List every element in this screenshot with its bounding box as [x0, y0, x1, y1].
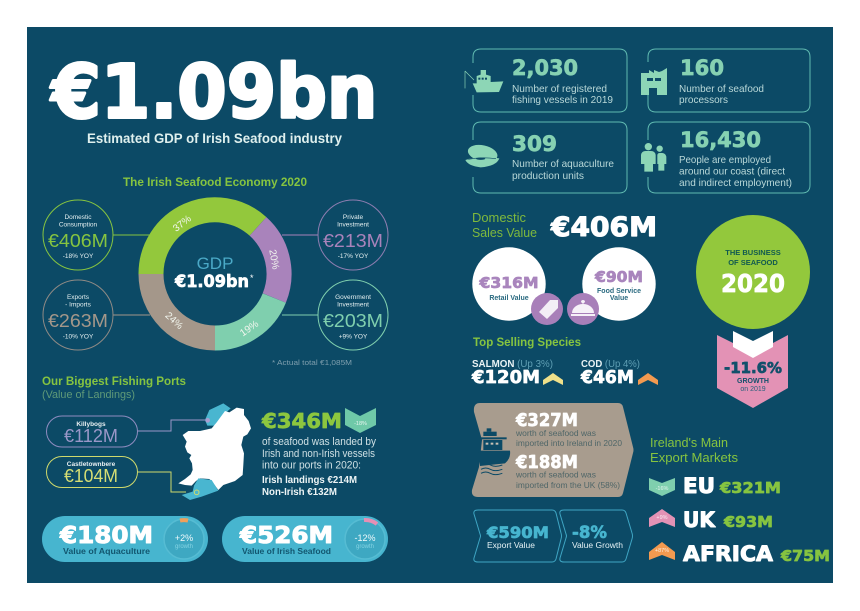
landings description: into our ports in 2020:	[262, 460, 361, 472]
heading: Top Selling Species	[473, 335, 581, 349]
callout: exports minus imports: Exports	[67, 294, 90, 301]
circle: food service value	[582, 247, 656, 321]
donut chart: 20%	[266, 249, 281, 270]
panel: imports: imported from the UK (58%)	[516, 480, 620, 490]
badge: growth on 2019: on 2019	[740, 386, 766, 393]
domestic sales total: €406M	[550, 212, 657, 243]
icon: factory	[641, 68, 667, 95]
heading: Ireland's Main	[650, 436, 728, 450]
stat box: aquaculture units	[465, 122, 627, 193]
callout: private investment: €213M	[323, 230, 383, 251]
callout: exports minus imports: - Imports	[65, 302, 92, 308]
species: salmon	[471, 358, 563, 388]
pill: value of aquaculture	[42, 516, 208, 562]
icon: price tag	[531, 293, 563, 325]
panel: imports	[472, 403, 634, 497]
species: salmon: SALMON (Up 3%)	[472, 358, 553, 370]
badge: business of seafood 2020: THE BUSINESS	[725, 248, 781, 257]
icon: ship on waves	[478, 428, 510, 475]
badge: business of seafood 2020: 2020	[721, 269, 785, 298]
pill: value of aquaculture: +2%	[175, 533, 193, 543]
donut chart: €1.09bn	[174, 272, 249, 292]
stat box: seafood processors: processors	[679, 94, 728, 106]
panel: imports: €327M	[515, 410, 578, 431]
stat box: seafood processors: Number of seafood	[679, 83, 764, 95]
panel: export value: Export Value	[487, 541, 536, 550]
icon: fishing boat	[465, 70, 503, 92]
callout: domestic consumption	[43, 200, 150, 270]
market: EU: -16%	[656, 486, 669, 492]
heading: The Irish Seafood Economy 2020	[123, 175, 307, 189]
callout: Killybogs: Killybogs	[76, 421, 106, 428]
badge: minus 18 percent: -18%	[354, 421, 367, 427]
market: Africa: AFRICA	[683, 542, 774, 566]
circle: retail value	[472, 247, 546, 321]
landings description: Irish and non-Irish vessels	[262, 448, 375, 460]
stat box: fishing vessels: Number of registered	[512, 83, 607, 95]
callout: domestic consumption: -18% YOY	[63, 253, 94, 260]
callout: exports minus imports: -10% YOY	[63, 334, 94, 340]
stat box: aquaculture units: 309	[512, 132, 557, 156]
subheading: (Value of Landings)	[42, 389, 135, 401]
landings total: €346M	[261, 409, 342, 433]
stat box: people employed: around our coast (direct	[679, 166, 785, 178]
stat box: people employed	[641, 122, 810, 193]
donut chart: GDP	[197, 254, 233, 273]
species: cod: COD (Up 4%)	[581, 358, 640, 370]
panel: imports: worth of seafood was	[515, 428, 596, 438]
market: EU: €321M	[719, 479, 781, 497]
callout: government investment: Government	[335, 294, 371, 301]
panel: seafood economy donut	[43, 175, 388, 367]
panel: imports: €188M	[515, 452, 578, 473]
callout: Castletownbere: Castletownbere	[67, 461, 116, 468]
pill: value of aquaculture: €180M	[59, 523, 153, 549]
species: cod: €46M	[580, 367, 634, 388]
panel: value growth: Value Growth	[572, 541, 623, 550]
panel: top selling species	[471, 335, 658, 388]
circle: retail value: Retail Value	[489, 295, 529, 302]
pill: value of Irish seafood	[222, 516, 388, 562]
market: UK: €93M	[723, 513, 773, 531]
callout: domestic consumption: Consumption	[59, 222, 98, 228]
panel: export value	[474, 510, 562, 562]
circle: food service value: €90M	[594, 268, 643, 286]
callout: exports minus imports	[43, 280, 150, 350]
footnote: * Actual total €1,085M	[272, 358, 352, 367]
species: cod	[580, 358, 658, 388]
callout: exports minus imports: €263M	[48, 310, 108, 331]
stat box: fishing vessels: 2,030	[512, 56, 578, 80]
market: Africa: +87%	[655, 548, 669, 554]
badge: business of seafood 2020	[696, 215, 810, 329]
map of Ireland	[178, 403, 251, 500]
icon: people	[641, 143, 666, 172]
pill: value of Irish seafood: Value of Irish Seafood	[242, 546, 331, 556]
landings description: Irish landings €214M	[262, 475, 357, 486]
badge: business of seafood 2020: OF SEAFOOD	[728, 258, 778, 267]
heading: Domestic	[472, 210, 526, 225]
callout: Killybogs: €112M	[64, 426, 118, 446]
stat box: aquaculture units: production units	[512, 170, 584, 182]
subtitle: Estimated GDP of Irish Seafood industry	[87, 131, 342, 146]
stat box: people employed: and indirect employment)	[679, 177, 792, 189]
stat box: people employed: People are employed	[679, 154, 771, 166]
heading	[650, 436, 738, 465]
stat box: seafood processors	[641, 49, 810, 112]
donut chart	[151, 210, 281, 339]
stat box: seafood processors: 160	[680, 56, 724, 80]
circle: food service value: Value	[610, 295, 628, 302]
callout: private investment: -17% YOY	[338, 253, 369, 260]
callout: Killybogs	[46, 416, 206, 447]
callout: domestic consumption: €406M	[48, 230, 108, 251]
pill: value of Irish seafood: growth	[356, 544, 374, 550]
market: UK	[649, 508, 773, 532]
market: Africa	[649, 542, 830, 566]
callout: private investment	[282, 200, 388, 270]
species: salmon: €120M	[471, 367, 540, 388]
pill: value of aquaculture: growth	[175, 544, 193, 550]
market: EU	[649, 474, 781, 498]
heading: Our Biggest Fishing Ports	[42, 374, 186, 388]
pill: value of Irish seafood: €526M	[239, 523, 333, 549]
panel: domestic sales	[472, 210, 657, 325]
landings description: of seafood was landed by	[262, 436, 376, 448]
panel: export markets	[649, 436, 830, 566]
pill: value of aquaculture: Value of Aquaculture	[63, 546, 150, 556]
badge: growth on 2019	[717, 331, 788, 408]
callout: domestic consumption: Domestic	[64, 214, 92, 221]
callout: private investment: Private	[343, 214, 363, 221]
landings description: Non-Irish €132M	[262, 487, 337, 498]
pill: value of Irish seafood: -12%	[354, 533, 376, 543]
panel: export value: €590M	[486, 523, 549, 542]
callout: government investment	[282, 280, 388, 350]
circle: food service value: Food Service	[597, 288, 641, 295]
market: Africa: €75M	[780, 547, 830, 565]
badge: growth on 2019: -11.6%	[724, 359, 782, 377]
icon: food cloche	[567, 293, 599, 325]
panel: value growth	[560, 510, 632, 562]
donut chart: 24%	[163, 310, 185, 332]
callout: Castletownbere: €104M	[64, 466, 118, 486]
callout: Castletownbere	[46, 456, 186, 492]
callout: private investment: Investment	[337, 222, 369, 228]
market: UK: UK	[683, 508, 716, 532]
panel: imports: imported into Ireland in 2020	[516, 438, 622, 448]
heading	[472, 210, 537, 240]
heading: Sales Value	[472, 225, 537, 240]
panel: fishing ports	[42, 374, 376, 500]
stat box: fishing vessels	[465, 49, 627, 112]
stat box: fishing vessels: fishing vessels in 2019	[512, 94, 613, 106]
badge: minus 18 percent	[345, 408, 376, 433]
panel: imports: worth of seafood was	[515, 470, 596, 480]
market: EU: EU	[683, 474, 715, 498]
badge: growth on 2019: GROWTH	[737, 378, 769, 385]
donut chart: *	[250, 273, 254, 283]
stat box: aquaculture units: Number of aquaculture	[512, 158, 614, 170]
market: UK: +9%	[656, 515, 668, 521]
callout: government investment: Investment	[337, 302, 369, 308]
stat box: people employed: 16,430	[680, 128, 761, 152]
title: €1.09bn	[50, 50, 378, 136]
icon: clam shell	[465, 142, 499, 167]
landings description	[262, 436, 376, 498]
heading: Export Markets	[650, 451, 738, 465]
donut chart: 37%	[171, 213, 194, 235]
callout: government investment: €203M	[323, 310, 383, 331]
callout: government investment: +9% YOY	[339, 334, 368, 340]
circle: retail value: €316M	[478, 274, 538, 292]
panel: value growth: -8%	[572, 523, 607, 543]
donut chart: 19%	[238, 319, 261, 339]
